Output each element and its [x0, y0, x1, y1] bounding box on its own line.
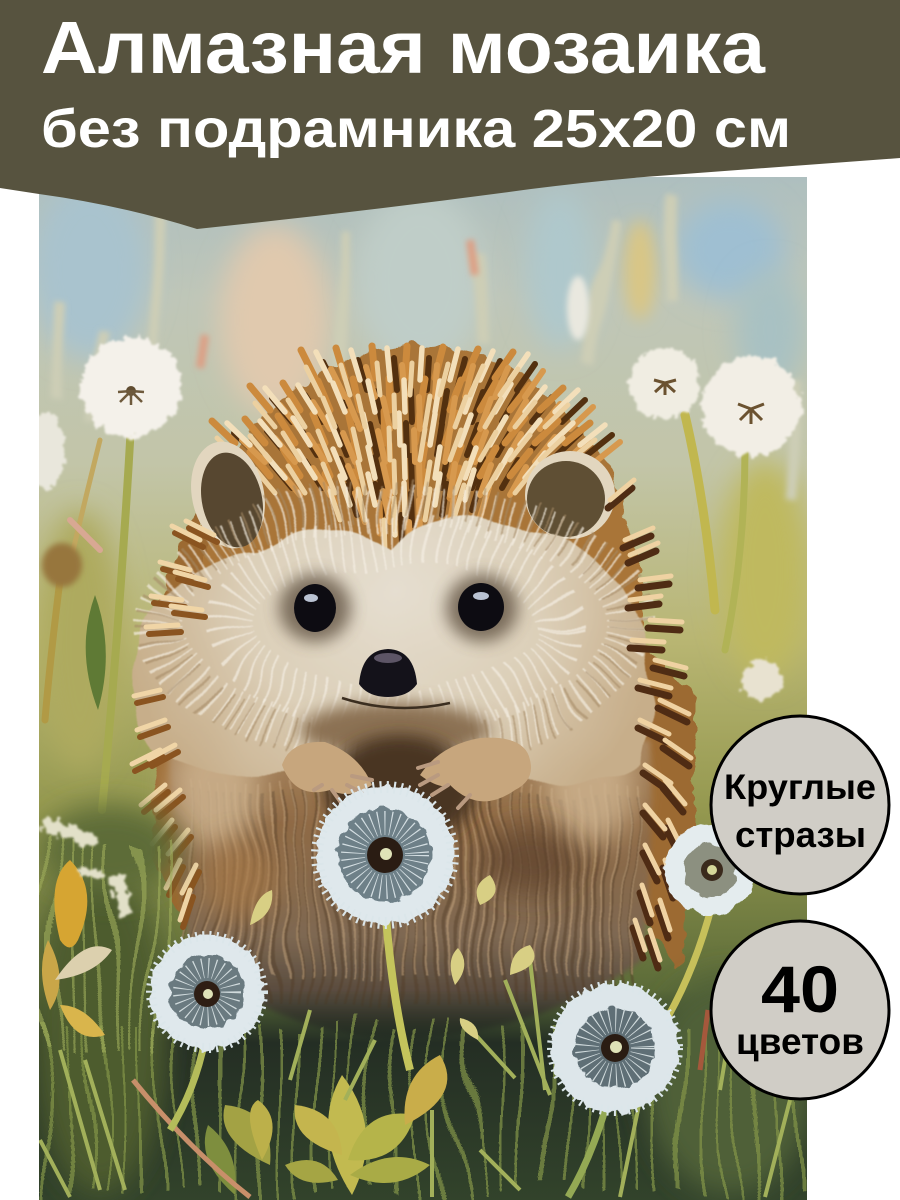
icon: dandelion lower left	[151, 936, 263, 1048]
grass texture left	[39, 850, 170, 1050]
meadow foreground	[32, 660, 815, 1200]
badge: round rhinestones	[711, 716, 889, 894]
hedgehog face fur	[139, 500, 652, 781]
hedgehog nose	[359, 649, 417, 697]
right paw	[418, 738, 531, 808]
header banner	[0, 0, 900, 229]
icon: dandelion top left	[81, 337, 181, 437]
eye shadows	[279, 574, 518, 642]
left paw	[282, 742, 372, 804]
badge: 40 colours: цветов	[736, 1021, 864, 1062]
hedgehog chest shadow	[325, 735, 475, 845]
grass texture	[39, 1025, 807, 1195]
painting background	[39, 177, 807, 1040]
icon: dandelion top right small	[629, 348, 699, 418]
fern leaves	[205, 1055, 447, 1195]
yellow leaves left	[42, 860, 112, 1037]
icon: dandelion right of hedgehog	[674, 834, 746, 906]
hedgehog body	[168, 730, 651, 1042]
icon: dandelion centre	[317, 787, 453, 923]
flank spines over the fur edge	[132, 480, 691, 968]
icon: dandelion lower right	[552, 985, 678, 1111]
badge: round rhinestones: Круглые	[724, 768, 876, 807]
icon: dandelion left edge	[39, 411, 68, 492]
hedgehog right eye	[458, 583, 504, 631]
icon: dandelion top right large	[701, 356, 801, 456]
flower buds	[250, 875, 534, 1040]
left ear	[191, 442, 265, 548]
hedgehog	[132, 345, 695, 1042]
title: Алмазная мозаика	[41, 6, 766, 89]
hedgehog spine dome	[150, 345, 695, 970]
right ear	[525, 451, 615, 539]
stems of the front dandelions	[170, 905, 712, 1197]
hedgehog left eye	[294, 584, 336, 632]
background stems and meadow plants	[42, 415, 745, 810]
hedgehog mouth	[342, 698, 450, 708]
badge: round rhinestones: стразы	[735, 814, 866, 855]
subtitle: без подрамника 25х20 см	[41, 99, 791, 159]
badge: 40 colours	[711, 921, 889, 1099]
painting: hedgehog in a dandelion meadow	[25, 177, 815, 1200]
grass blades	[133, 1080, 250, 1197]
small white flowers left	[48, 825, 125, 910]
badge: 40 colours: 40	[761, 952, 839, 1026]
